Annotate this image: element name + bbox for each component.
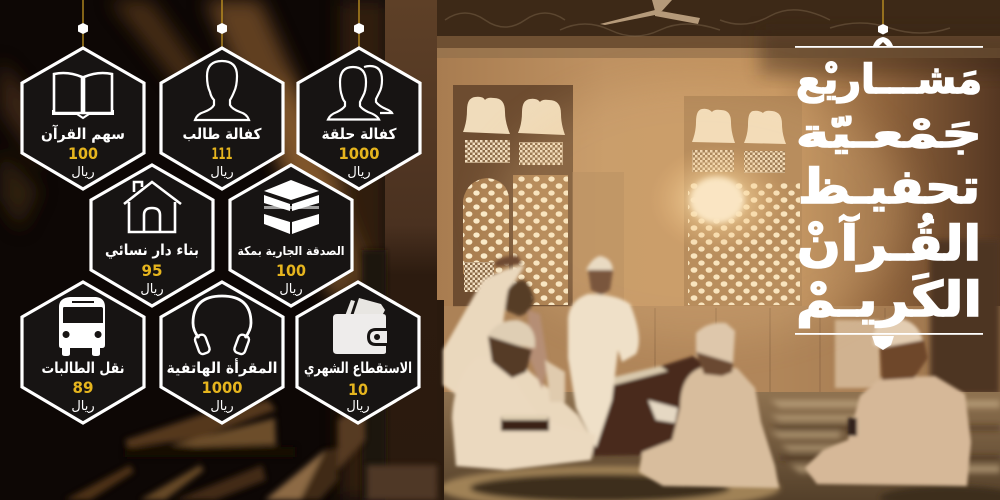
rug floor xyxy=(437,392,1000,500)
title lines: تحفيـظ xyxy=(798,159,980,215)
title lines: الكَريـمْ xyxy=(796,272,982,328)
hexagon: المقرأة الهاتفية: ريال xyxy=(210,399,234,414)
title lines xyxy=(796,57,982,328)
hexagon: كفالة طالب: ريال xyxy=(210,165,234,180)
icon: kaaba xyxy=(264,180,319,234)
hexagon: بناء دار نسائي: ريال xyxy=(140,282,164,297)
hexagon: كفالة حلقة: كفالة حلقة xyxy=(322,125,397,143)
top ornament xyxy=(795,0,983,48)
icon: house xyxy=(124,182,181,232)
hexagon: نقل الطالبات: 89 xyxy=(72,378,94,397)
hexagon: الصدقة الجارية بمكة: 100 xyxy=(276,261,306,280)
ceiling calligraphy band xyxy=(437,0,1000,40)
hexagon: سهم القرآن: 100 xyxy=(68,144,98,163)
hexagon: الاستقطاع الشهري: الاستقطاع الشهري xyxy=(304,359,412,378)
hexagon: كفالة حلقة: 1000 xyxy=(338,144,380,163)
hexagon: الاستقطاع الشهري xyxy=(297,282,419,423)
teacher xyxy=(443,265,598,455)
hexagon: كفالة حلقة xyxy=(298,48,420,189)
hexagon: الاستقطاع الشهري: 10 xyxy=(348,380,368,399)
lower wall panelling xyxy=(437,306,1000,396)
left dark area with light beams xyxy=(0,0,388,500)
title lines: القُـرآنْ xyxy=(797,214,981,272)
hexagon: الاستقطاع الشهري: ريال xyxy=(346,399,370,414)
hexagon: بناء دار نسائي xyxy=(91,165,213,306)
seated group figures xyxy=(443,256,971,488)
window frame right xyxy=(684,96,802,306)
hexagon: كفالة طالب: كفالة طالب xyxy=(182,125,262,143)
hexagon: نقل الطالبات: نقل الطالبات xyxy=(42,359,124,377)
warm haze xyxy=(490,80,910,340)
window frame left xyxy=(453,85,573,307)
pillar xyxy=(385,0,437,500)
wooden benches bottom left xyxy=(65,400,365,500)
title block xyxy=(795,0,983,350)
hexagon: سهم القرآن: ريال xyxy=(71,165,95,180)
hexagon: نقل الطالبات: ريال xyxy=(71,399,95,414)
hexagon: بناء دار نسائي: بناء دار نسائي xyxy=(105,241,199,259)
icon: bus xyxy=(59,297,105,356)
hexagon: كفالة طالب xyxy=(161,48,283,189)
icon: person xyxy=(195,61,249,120)
icon: headphones xyxy=(193,296,251,355)
panel between windows xyxy=(572,172,624,307)
hexagon: كفالة حلقة: ريال xyxy=(347,165,371,180)
lectern xyxy=(593,356,701,456)
hexagon: المقرأة الهاتفية xyxy=(161,282,283,423)
wall xyxy=(437,40,1000,400)
centre boy xyxy=(639,368,779,488)
hexagon: المقرأة الهاتفية: المقرأة الهاتفية xyxy=(166,358,278,377)
hexagon: الصدقة الجارية بمكة: الصدقة الجارية بمكة xyxy=(238,244,344,258)
hexagon: المقرأة الهاتفية: 1000 xyxy=(202,378,242,397)
hexagon: سهم القرآن: سهم القرآن xyxy=(41,125,125,143)
standing boy xyxy=(568,294,639,448)
hanging strings and beads xyxy=(78,0,364,48)
icon: wallet xyxy=(333,298,387,354)
sun glow xyxy=(648,145,788,255)
title lines: جَمْعـيّة xyxy=(796,111,982,157)
hexagon: الصدقة الجارية بمكة: ريال xyxy=(279,282,303,297)
icon: two people xyxy=(328,66,392,120)
seated boy left xyxy=(452,358,596,470)
hexagon: الصدقة الجارية بمكة xyxy=(230,165,352,306)
ceiling fan xyxy=(600,0,700,25)
title lines: مَشـــاريْع xyxy=(796,57,982,103)
hexagon: بناء دار نسائي: 95 xyxy=(142,261,162,280)
hexagon: سهم القرآن xyxy=(22,48,144,189)
hexagon: كفالة طالب: 111 xyxy=(212,144,232,163)
bottom ornament xyxy=(795,333,983,350)
hexagon: نقل الطالبات xyxy=(22,282,144,423)
icon: open book xyxy=(53,73,113,118)
right boy xyxy=(805,376,971,486)
